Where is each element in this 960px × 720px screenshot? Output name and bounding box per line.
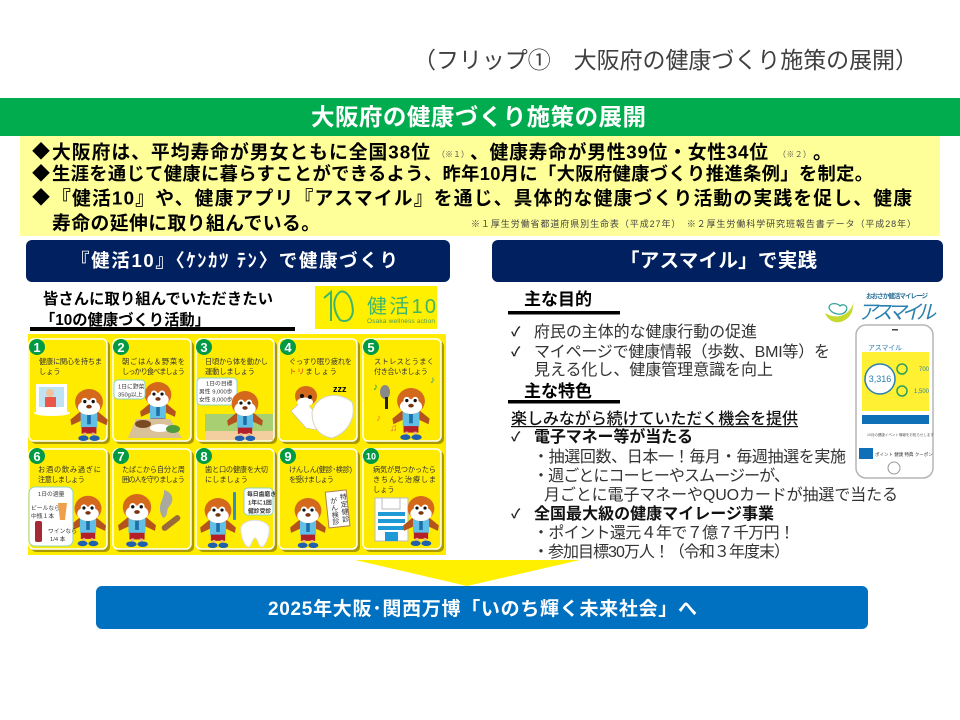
panel: summary: 。 [813, 142, 832, 162]
heading: ten activities: 「10の健康づくり活動」 [40, 311, 210, 329]
card 2: 朝ごはん＆野菜を [122, 357, 185, 366]
card 9: を受けましょう [289, 475, 334, 484]
card 1 [29, 339, 110, 444]
card 10 [363, 448, 444, 552]
list: purposes: マイページで健康情報（歩数、BMI等）を [534, 343, 830, 361]
icon: smartphone: 10月の健康イベント情報をお知らせします [867, 432, 934, 437]
card 4: ぐっすり眠り疲れを [289, 357, 352, 366]
panel: summary: 、健康寿命が男性39位・女性34位 [470, 140, 768, 162]
section: main features: 主な特色 [524, 381, 592, 401]
card 7 [113, 448, 194, 552]
icon: smartphone: 3,316 [869, 374, 891, 384]
panel: summary: ※１厚生労働省都道府県別生命表（平成27年） ※２厚生労働科学研究班報告書データ（平成28年） [471, 218, 916, 229]
card 9: 特 [339, 492, 347, 502]
heading: ten activities: 皆さんに取り組んでいただきたい [43, 290, 273, 308]
card 5: ストレスとうまく [374, 357, 434, 366]
card 3: 男性 9,000歩 [199, 388, 233, 396]
card 1: 1 [33, 340, 41, 355]
card 6: 中瓶１本 [31, 512, 54, 520]
panel: summary: ◆ [32, 142, 50, 162]
card 9: 診 [342, 514, 350, 524]
card 7: たばこから自分と周 [122, 465, 185, 474]
list: features: ・参加目標30万人！（令和３年度末） [533, 543, 790, 561]
list: purposes: 府民の主体的な健康行動の促進 [534, 323, 757, 341]
list: purposes: ✓ [511, 344, 521, 359]
arrow: down to Expo [355, 560, 580, 586]
card 3: 運動しましょう [205, 367, 255, 376]
list: features: 楽しみながら続けていただく機会を提供 [511, 409, 798, 428]
card 3: 3 [200, 340, 208, 355]
card 9: 9 [284, 449, 292, 464]
list: features: 月ごとに電子マネーやQUOカードが抽選で当たる [544, 486, 898, 504]
card 4: zzz [333, 384, 347, 394]
card 9: ん [331, 504, 338, 513]
list: features: ・抽選回数、日本一！毎月・毎週抽選を実施 [533, 448, 846, 466]
panel: summary: 生涯を通じて健康に暮らすことができるよう、昨年10月に「大阪府健康づくり推進条例」を制定。 [52, 163, 873, 184]
card 10: 10 [366, 452, 376, 462]
card 4: トリましょう [289, 367, 337, 376]
title: （フリップ① 大阪府の健康づくり施策の展開） [413, 47, 918, 73]
card 1: しょう [39, 367, 61, 376]
panel: summary: ◆ [32, 188, 50, 208]
card 8: 健診受診 [248, 507, 271, 515]
list: features: ・週ごとにコーヒーやスムージーが、 [533, 467, 790, 485]
panel: summary: 『健活10』や、健康アプリ『アスマイル』を通じ、具体的な健康づくり活動の実践を促し、健康 [52, 188, 912, 208]
card 2: 2 [117, 340, 125, 355]
card 5 [363, 339, 444, 444]
logo: Kenkatsu 10: 健活10 [367, 295, 436, 318]
card 7: 7 [117, 449, 125, 464]
card 1: 健康に関心を持ちま [39, 357, 102, 366]
list: purposes [511, 323, 830, 379]
card 2: 350g以上 [118, 390, 143, 398]
banner: Expo 2025: 2025年大阪･関西万博「いのち輝く未来社会」へ [268, 597, 697, 620]
card 10: しょう [373, 485, 395, 494]
panel: summary: （※１） [437, 150, 469, 159]
icon: smartphone [856, 325, 934, 478]
card 6 [29, 448, 110, 552]
card 3 [196, 339, 277, 444]
card 5: ♪ [373, 382, 378, 393]
icon: smartphone: 1,500 [914, 389, 930, 395]
card 10: 病気が見つかったら [373, 465, 436, 474]
card 5: 5 [367, 340, 375, 355]
section: main features [508, 381, 620, 404]
banner: green heading band: 大阪府の健康づくり施策の展開 [311, 104, 646, 130]
card 8: 8 [200, 449, 208, 464]
card 3: 女性 8,000歩 [199, 396, 233, 404]
card 6: 注意しましょう [38, 475, 85, 484]
panel: ten activity cards [28, 334, 446, 555]
header: Asmile: 「アスマイル」で実践 [620, 250, 817, 272]
card 8 [196, 448, 277, 552]
card 6: ビールなら [31, 504, 60, 512]
list: features: ・ポイント還元４年で７億７千万円！ [533, 524, 795, 542]
panel: summary: ◆ [32, 164, 50, 184]
list: features: ✓ [511, 506, 521, 521]
card 9: 定 [340, 500, 348, 509]
card 8: 歯と口の健康を大切 [205, 465, 268, 474]
card 6: 1/4 本 [50, 535, 66, 543]
header: Kenkatsu 10: 『健活10』〈ｹﾝｶﾂ ﾃﾝ〉で健康づくり [71, 250, 398, 271]
heading: ten activities [30, 290, 295, 331]
card 9: が [330, 496, 338, 506]
list: purposes: ✓ [511, 324, 521, 339]
card 9: 健 [341, 507, 349, 517]
logo: Asmile: アスマイル [858, 302, 937, 324]
card 8: にしましょう [205, 475, 248, 484]
panel: summary: （※２） [778, 150, 811, 159]
logo: Kenkatsu 10 [315, 286, 437, 329]
banner: green heading band [0, 98, 960, 136]
card 9 [279, 448, 360, 552]
card 5: ♪ [376, 413, 381, 424]
icon: smartphone: アスマイル [868, 344, 902, 352]
card 4: 4 [284, 340, 292, 355]
list: features [511, 409, 898, 561]
section: main purpose: 主な目的 [524, 290, 592, 309]
card 6: 1日の適量 [38, 490, 65, 498]
card 6: ワインなら [48, 528, 77, 535]
header: Asmile [492, 240, 943, 282]
card 8: 1年に1回 [248, 498, 272, 506]
list: features: ✓ [511, 429, 521, 444]
card 3: 日頃から体を動かし [205, 357, 268, 366]
card 6: 6 [33, 449, 41, 464]
card 2: しっかり食べましょう [122, 367, 185, 376]
icon: smartphone: 700 [919, 367, 930, 373]
card 2 [113, 339, 194, 444]
card 5: ♫ [390, 423, 398, 434]
section: main purpose [508, 290, 620, 314]
banner: Expo 2025 [96, 586, 868, 629]
panel: summary: 寿命の延伸に取り組んでいる。 [52, 212, 320, 234]
card 2: 1日に野菜 [118, 382, 145, 390]
card 9: けんしん(健診･検診) [289, 465, 352, 474]
card 5: ♪ [430, 375, 435, 386]
panel: summary [20, 136, 940, 236]
icon: smartphone: ポイント 健康 特典 クーポン [875, 451, 933, 458]
list: purposes: 見える化し、健康管理意識を向上 [534, 361, 773, 379]
logo: Asmile: おおさか健活マイレージ [866, 291, 928, 300]
card 4 [279, 339, 360, 444]
header: Kenkatsu 10 [26, 240, 450, 282]
logo: Kenkatsu 10: Osaka wellness action [367, 318, 435, 325]
card 3: 1日の目標 [206, 380, 233, 388]
list: features: 全国最大級の健康マイレージ事業 [534, 504, 774, 523]
card 8: 毎日歯磨き [247, 490, 276, 498]
logo: Asmile [825, 291, 937, 324]
card 7: 囲の人を守りましょう [122, 475, 185, 484]
list: features: 電子マネー等が当たる [534, 427, 693, 446]
card 6: お酒の飲み過ぎに [38, 465, 101, 474]
card 10: きちんと治療しま [373, 475, 436, 484]
panel: summary: 大阪府は、平均寿命が男女ともに全国38位 [52, 140, 430, 162]
card 9: 検 [331, 510, 339, 520]
card 5: 付き合いましょう [374, 367, 428, 376]
card 9: 診 [332, 517, 340, 527]
